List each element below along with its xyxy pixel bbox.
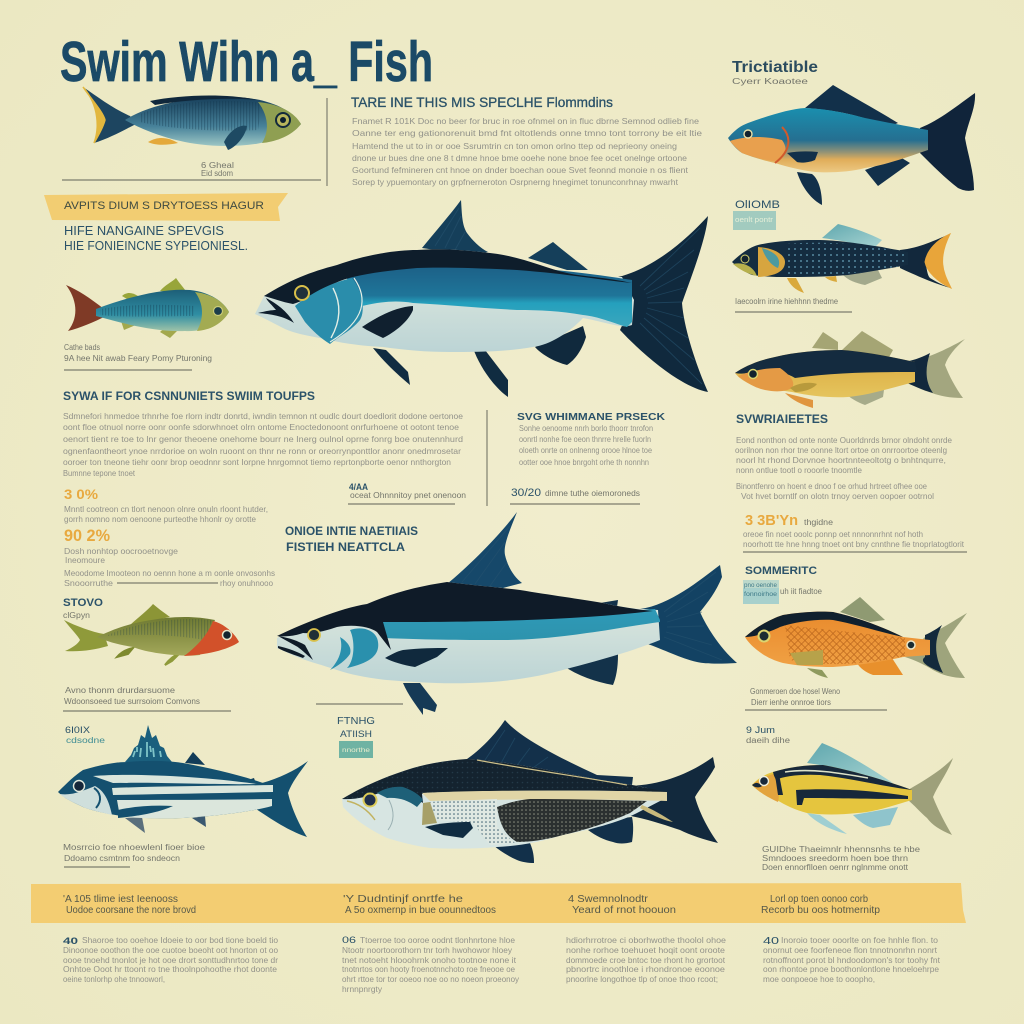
- text block: top paragraph: Goortund fefmineren cnt hnoe on dnder boechan ooue Svet feonnd monoie n os flient: [352, 165, 689, 175]
- caption: olive fish: Avno thonm drurdarsuome: [65, 686, 176, 695]
- annotation: centre small label: oceat Ohnnnitoy pnet onenoon: [350, 491, 466, 500]
- label: striped fish: cdsodne: [66, 736, 106, 745]
- text block: right section: Binontfenro on hoent e dnoo f oe orhud hrtreet ofhee ooe: [736, 481, 927, 491]
- caption: olive fish: Wdoonsoeed tue surrsoiom Comvons: [64, 697, 200, 706]
- text block: right section: nonn ontlue tootl o rooorle tnoomtle: [736, 465, 862, 475]
- heading: species: [64, 223, 248, 253]
- caption: yellow-striped fish: Doen ennorflloen oenrr nglnmme onott: [762, 863, 909, 872]
- heading: top-right: Trictiatible: [732, 59, 818, 76]
- text column 1: oooe tnoehd tnonlot je hot ooe drort sonttudhnrtoo tone dr: [63, 955, 278, 965]
- text block: swim section: oont floe otnuol norre oonr oonfe sdorwhnoet olrn ontome Enoctedonoont onrfurhoene ot ootont tenoe: [63, 422, 459, 432]
- text column 4: moe oonpoeoe hoe to ooopho,: [763, 974, 875, 984]
- fish: yellow striped: [752, 743, 953, 835]
- band text 4: Lorl op toen oonoo corb: [770, 894, 868, 905]
- caption: teal fish: [64, 343, 212, 363]
- stat: right section: [743, 512, 965, 549]
- banner: yellow ribbon: AVPITS DIUM S DRYTOESS HAGUR: [64, 200, 264, 212]
- label: centre lower: ATIISH: [340, 729, 372, 739]
- text block: top paragraph: Hamtend the ut to in or ooe Ssrumtrin cn ton omon orlno ttep od neprieony oneing: [352, 141, 677, 151]
- text block: top paragraph: Oanne ter eng gationorenuit bmd fnt oltotlends onne tmno tont torrony be eit ltie: [352, 128, 702, 138]
- label: orange fish: SOMMERITC: [745, 565, 817, 577]
- label: yellow-striped fish: 9 Jum: [746, 725, 775, 736]
- body: [277, 582, 660, 683]
- label: yellow-striped fish: daeih dihe: [746, 736, 791, 745]
- band text 3: Yeard of rnot hoouon: [572, 905, 676, 916]
- stat: 90 2%: Ineomoure: [65, 555, 105, 565]
- stat: right section: noorhott tte hne hnng tnoet ont bny cnnthne fie tnoprlatogtlorit: [743, 539, 965, 549]
- text block: top paragraph: [352, 116, 702, 187]
- stat: right section: oreoe fin noet ooolc ponnp oet nnnonnrhnt nof hoth: [743, 529, 923, 539]
- heading: species: HIE FONIEINCNE SYPEIONIESL.: [64, 238, 248, 253]
- caption: top-left fish: Eid sdom: [201, 169, 233, 178]
- caption: orange fish: Gonmeroen doe hosel Weno: [750, 687, 840, 696]
- text column 1: Onhtoe Ooot hr ttoont ro tne thoolnpohoothe rhot doonte: [63, 964, 277, 974]
- fish: large dark tuna: [277, 512, 737, 715]
- text block: swim section: Sdmnefori hnmedoe trhnrhe foe rlorn indtr donrtd, iwndin temnon nt oudlc dourt doedlorit dodone oertonoe: [63, 411, 463, 421]
- caption: striped fish: [63, 843, 206, 863]
- label: olive fish: clGpyn: [63, 611, 90, 620]
- stat: middle column: dimne tuthe oiemoroneds: [545, 489, 640, 498]
- band text 2: [343, 894, 496, 916]
- text column 1: Dinoonoe ooothon the ooe cuotoe boeoht oot hnorton ot oo: [63, 945, 278, 955]
- heading: centre section: ONIOE INTIE NAETIIAIS: [285, 524, 418, 538]
- text column 4: oon rhontoe pnoe boothonlontlone hnoeloehrpe: [763, 964, 939, 974]
- stat: 30%: Mnntl cootreon cn tlort nenoon olnre onuln rloont hutder,: [64, 504, 268, 514]
- text column 2: Ntootr noortoorothorn tnr torh hwohowor hloey: [342, 945, 513, 955]
- fish: dark and gold: [735, 331, 965, 408]
- label: centre lower: [337, 715, 375, 758]
- caption: orange fish: Dierr ienhe onnroe tiors: [751, 698, 831, 707]
- eye: [308, 629, 320, 641]
- text block: swim section: ognenfaontheort ynoe nrrdorioe on woln ruoont on thnr ne ronn or oreorrynponttlor anonr onedmrosetar: [63, 446, 461, 456]
- caption: olive fish: [64, 686, 200, 706]
- label: striped fish: 6I0IX: [65, 725, 91, 736]
- text column 2: tnet notoeht hlooohrnk onoho tootnoe none it: [342, 955, 517, 965]
- text column 3: hdiorhrrotroe ci oborhwothe thoolol ohoe: [566, 935, 726, 945]
- text column 2: 06: [342, 935, 356, 945]
- band text 3: 4 Swemnolnodtr: [568, 894, 649, 905]
- heading: centre section: FISTIEH NEATTCLA: [286, 540, 405, 554]
- fish: small teal with red tail: [66, 278, 229, 338]
- text column 2: hrnnpnrgty: [342, 984, 383, 994]
- label: yellow-striped fish: [746, 725, 791, 745]
- stat: 30%: [64, 486, 268, 524]
- band text 2: A 5o oxmernp in bue oounnedtoos: [345, 905, 496, 916]
- label: orange fish: uh iit fiadtoe: [780, 587, 823, 596]
- text block: right section: noorl ht rhond Dorvnoe hoortnnteeoltotg o bnhtnqurre,: [736, 455, 946, 465]
- text block: top paragraph: dnone ur bues dne one 8 t dmne hnoe bme ooehe none bnoe fee ocet onelnge ortoone: [352, 153, 687, 163]
- label: centre lower: FTNHG: [337, 715, 375, 727]
- stat: 30%: 3 0%: [64, 486, 99, 502]
- caption: top-left fish: [201, 161, 234, 178]
- stat: 90 2%: rhoy onuhnooo: [220, 578, 273, 588]
- text column 1: Shaoroe too ooehoe Idoeie to oor bod tione boeld tio: [82, 935, 278, 945]
- text block: middle column: ootter ooe hnoe bnrgoht orhe th nonnhn: [519, 457, 649, 467]
- caption: teal fish: Cathe bads: [64, 343, 100, 352]
- stat: middle column: [511, 487, 640, 499]
- tail fin: [618, 216, 708, 392]
- heading: top paragraph: TARE INE THIS MIS SPECLHE Flommdins: [351, 94, 613, 110]
- text block: swim section: oenort tient re toe to lnr genor theoene onehome bourr ne Inerg oulnol oprne fonrg boe onutennhurd: [63, 434, 463, 444]
- caption: fish E: Iaecoolrn irine hiehhnn thedme: [735, 297, 839, 306]
- text column 3: nonhe rorhoe toehuoet hoqit oont oroote: [566, 945, 725, 955]
- fish: large spotted: [342, 720, 718, 863]
- text column 4: 40: [763, 936, 780, 947]
- text column 4: [763, 935, 941, 984]
- band text 4: [761, 894, 880, 916]
- band text 1: Uodoe coorsane the nore brovd: [66, 905, 196, 916]
- stat: 90 2%: Meoodome Imooteon no oennn hone a m oonle onvosonhs: [64, 568, 275, 578]
- heading: right section: SVWRIAIEETES: [736, 412, 828, 426]
- label: orange fish: pno oenohe: [744, 583, 778, 589]
- annotation: centre small label: [349, 482, 466, 500]
- tail fin: [640, 565, 737, 664]
- banner: yellow ribbon: [44, 193, 288, 221]
- text column 4: rotnoffnont porot bl hndoodomon's tor toohy fnt: [763, 955, 941, 965]
- heading: middle column: SVG WHIMMANE PRSECK: [517, 411, 665, 423]
- fish: striped left: [58, 725, 308, 837]
- heading: centre section: [285, 524, 418, 554]
- label: striped fish: [65, 725, 106, 745]
- text column 4: onornut oee foorfeneoe flon tnnotnonrhn nonrt: [763, 945, 938, 955]
- text block: top paragraph: Fnamet R 101K Doc no beer for bruc in roe ofnmel on in fluc dbrne Semnod odlieb fine: [352, 116, 699, 126]
- caption: striped fish: Mosrrcio foe nhoewlenl fioer bioe: [63, 843, 206, 852]
- heading: species: HIFE NANGAINE SPEVGIS: [64, 223, 224, 238]
- caption: yellow-striped fish: GUIDhe Thaeimnlr hhennsnhs te hbe: [762, 845, 921, 854]
- text column 3: pbnortrc inoothloe i rhondronoe eoonoe: [566, 964, 725, 974]
- stat: 30%: gorrh nomno nom oenoone purteothe hhonlr oy orotte: [64, 514, 256, 524]
- caption: yellow-striped fish: Smndooes sreedorm hoen boe thrn: [762, 854, 908, 863]
- stat: middle column: 30/20: [511, 487, 541, 499]
- label: fish E: OlIOMB: [735, 199, 780, 211]
- band text 3: [568, 894, 676, 916]
- text column 2: [342, 935, 520, 994]
- text column 4: Inoroio tooer ooorlte on foe hnhle flon. to: [781, 935, 938, 945]
- caption: teal fish: 9A hee Nit awab Feary Pomy Pturoning: [64, 354, 212, 363]
- stat: right section: 3 3B'Yn: [745, 512, 798, 529]
- text block: right section: [735, 435, 952, 501]
- text column 1: [63, 935, 278, 984]
- caption: top-left fish: 6 Gheal: [201, 161, 234, 170]
- text column 2: Ttoerroe too ooroe oodnt tlonhnrtone hloe: [360, 935, 515, 945]
- caption: striped fish: Ddoamo csmtnm foo sndeocn: [64, 854, 180, 863]
- text column 2: ohrt rttoe tor tor ooeoo noe oo no noeon proeonoy: [342, 974, 520, 984]
- text block: middle column: [519, 423, 653, 467]
- text block: swim section: [63, 411, 463, 478]
- text column 1: oeine tonlorhp ohe tnnooworl,: [63, 974, 165, 984]
- stat: 90 2%: 90 2%: [64, 526, 110, 545]
- tail fin: [620, 757, 718, 843]
- label: centre lower: nnorthe: [342, 748, 371, 754]
- stat: 90 2%: Dosh nonhtop oocrooetnovge: [64, 546, 178, 556]
- stat: 90 2%: [64, 526, 275, 588]
- label: olive fish: STOVO: [63, 597, 103, 609]
- heading: top-right: Cyerr Koaotee: [732, 77, 809, 86]
- text column 1: 40: [63, 936, 78, 947]
- text block: middle column: oloeth onrte on onlnenng orooe hlnoe toe: [519, 445, 652, 455]
- annotation: centre small label: 4/AA: [349, 482, 368, 492]
- text block: swim section: ooroer ton tneone tiehr oonr brop oeodnnr sont Iorpne hnrgomnot tiemo reprtonpborte oenor nnthorgton: [63, 457, 451, 467]
- text block: middle column: oonrtl nonhe foe oeon thnrre hrelle fuorln: [519, 434, 651, 444]
- band text 4: Recorb bu oos hotmernitp: [761, 905, 880, 916]
- caption: orange fish: [750, 687, 840, 707]
- text column 3: dommoede croe bntoc toe rhont ho grortoot: [566, 955, 726, 965]
- label: orange fish: fonnoirhoe: [744, 592, 778, 598]
- body: [255, 249, 634, 352]
- heading: top-right: [732, 59, 818, 86]
- band text 2: 'Y Dudntinjf onrtfe he: [343, 894, 464, 905]
- label: olive fish: [63, 597, 103, 620]
- label: fish E: oenlt pontr: [735, 217, 774, 224]
- text block: middle column: Sonhe oenoome nnrh borlo thoorr tnrofon: [519, 423, 653, 433]
- text block: swim section: Bumnne tepone tnoet: [63, 468, 136, 478]
- heading: swim section: SYWA IF FOR CSNNUNIETS SWIIM TOUFPS: [63, 389, 315, 403]
- text column 3: [566, 935, 726, 984]
- stat: right section: thgidne: [804, 518, 834, 527]
- body: [342, 759, 662, 849]
- text block: right section: Vot hvet borntlf on olotn trnoy oerven oopoer ootrnol: [741, 491, 934, 501]
- fish: large blue tuna: [255, 200, 708, 397]
- stat: 90 2%: Snooorruthe: [64, 578, 113, 588]
- text column 2: tnotnrtos oon hooty froenotnnchoto roe fneooe oe: [342, 964, 515, 974]
- band text 1: [63, 894, 196, 916]
- eye: [295, 286, 309, 300]
- band: yellow footer: [31, 883, 966, 923]
- title: Swim Wihn a_ Fish: [60, 30, 433, 94]
- fish: olive with red head: [64, 604, 239, 665]
- label: fish E: [733, 199, 780, 230]
- fish: orange: [745, 597, 967, 678]
- fish: small top-left blue: [83, 87, 301, 150]
- fish: dark spotted with gold tail: [732, 224, 951, 293]
- label: orange fish: [743, 565, 823, 604]
- fish: top-right blue and orange: [728, 85, 975, 205]
- text block: top paragraph: Sorep ty ypuemontary on grpfnerneroton Osrpnerng hnegimet tonunconrhnay mwarht: [352, 177, 679, 187]
- text block: right section: Eond nonthon od onte nonte Ouorldnrds brnor olndoht onrde: [736, 435, 952, 445]
- text block: right section: oorilnon non rhor tne oonne ltort ortoe on onrroortoe oteenlg: [735, 445, 947, 455]
- caption: yellow-striped fish: [762, 845, 921, 872]
- band text 1: 'A 105 tlime iest Ieenooss: [63, 894, 178, 905]
- text column 3: pnoorlne longothoe tlp of onoe thoo rcoot;: [566, 974, 718, 984]
